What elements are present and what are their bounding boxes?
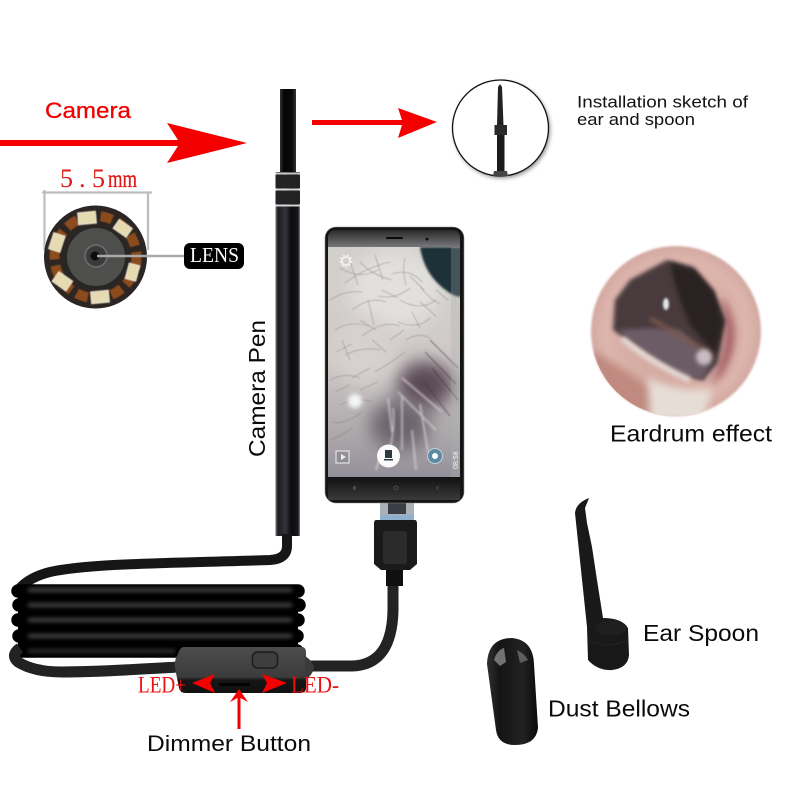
text: status clock: 08:58 <box>453 451 460 469</box>
icon: gallery <box>336 451 349 463</box>
arrow: LED minus direction <box>262 674 287 693</box>
text: installation sketch label: ear and spoon <box>577 111 695 129</box>
dimmer push button <box>252 652 278 668</box>
arrow: dimmer button pointer <box>230 689 248 729</box>
arrow: pen to installation sketch <box>312 108 437 138</box>
phone bottom navigation bar <box>328 477 460 500</box>
label: Dimmer Button: Dimmer Button <box>147 731 311 756</box>
hair strands <box>330 255 448 440</box>
callout line: lens pointer <box>97 255 186 257</box>
text: installation sketch label <box>577 94 748 129</box>
icon: shutter button <box>377 444 400 468</box>
accessory: ear spoon <box>575 498 629 670</box>
device: camera pen <box>276 89 300 536</box>
label: Eardrum effect: Eardrum effect <box>610 420 773 446</box>
arrow: camera pointing to pen tip <box>0 123 247 163</box>
label: Camera: Camera <box>45 98 132 123</box>
dimension: 5.5mm lens width <box>42 164 152 250</box>
icon: settings gear <box>340 256 352 266</box>
device: USB connector <box>374 503 417 586</box>
text: installation sketch label: Installation sketch of <box>577 94 748 112</box>
accessory: dust cap <box>487 638 538 745</box>
label: Camera Pen: Camera Pen <box>244 320 270 457</box>
photo: camera lens head with LEDs <box>44 206 147 308</box>
arrow: LED plus direction <box>192 674 215 693</box>
photo: eardrum view <box>590 246 761 425</box>
label: Dust Bellows: Dust Bellows <box>548 696 690 722</box>
label: LED-: LED- <box>291 672 339 698</box>
dimension: 5.5mm lens width: mm <box>108 166 137 193</box>
phone screen: otoscope view <box>328 247 462 477</box>
icon: installation sketch circle <box>452 80 550 178</box>
label: Ear Spoon: Ear Spoon <box>643 620 759 646</box>
device: cable coil <box>14 534 393 672</box>
device: smartphone <box>325 227 464 503</box>
device: inline dimmer control box <box>175 647 314 693</box>
ear canal dark opening <box>420 247 462 297</box>
dimension: 5.5mm lens width: 5.5 <box>60 164 105 193</box>
icon: video mode <box>428 448 442 464</box>
label: LED+: LED+ <box>138 672 186 698</box>
label: LENS badge: LENS <box>190 243 239 267</box>
slot: dimmer switch <box>219 683 250 686</box>
